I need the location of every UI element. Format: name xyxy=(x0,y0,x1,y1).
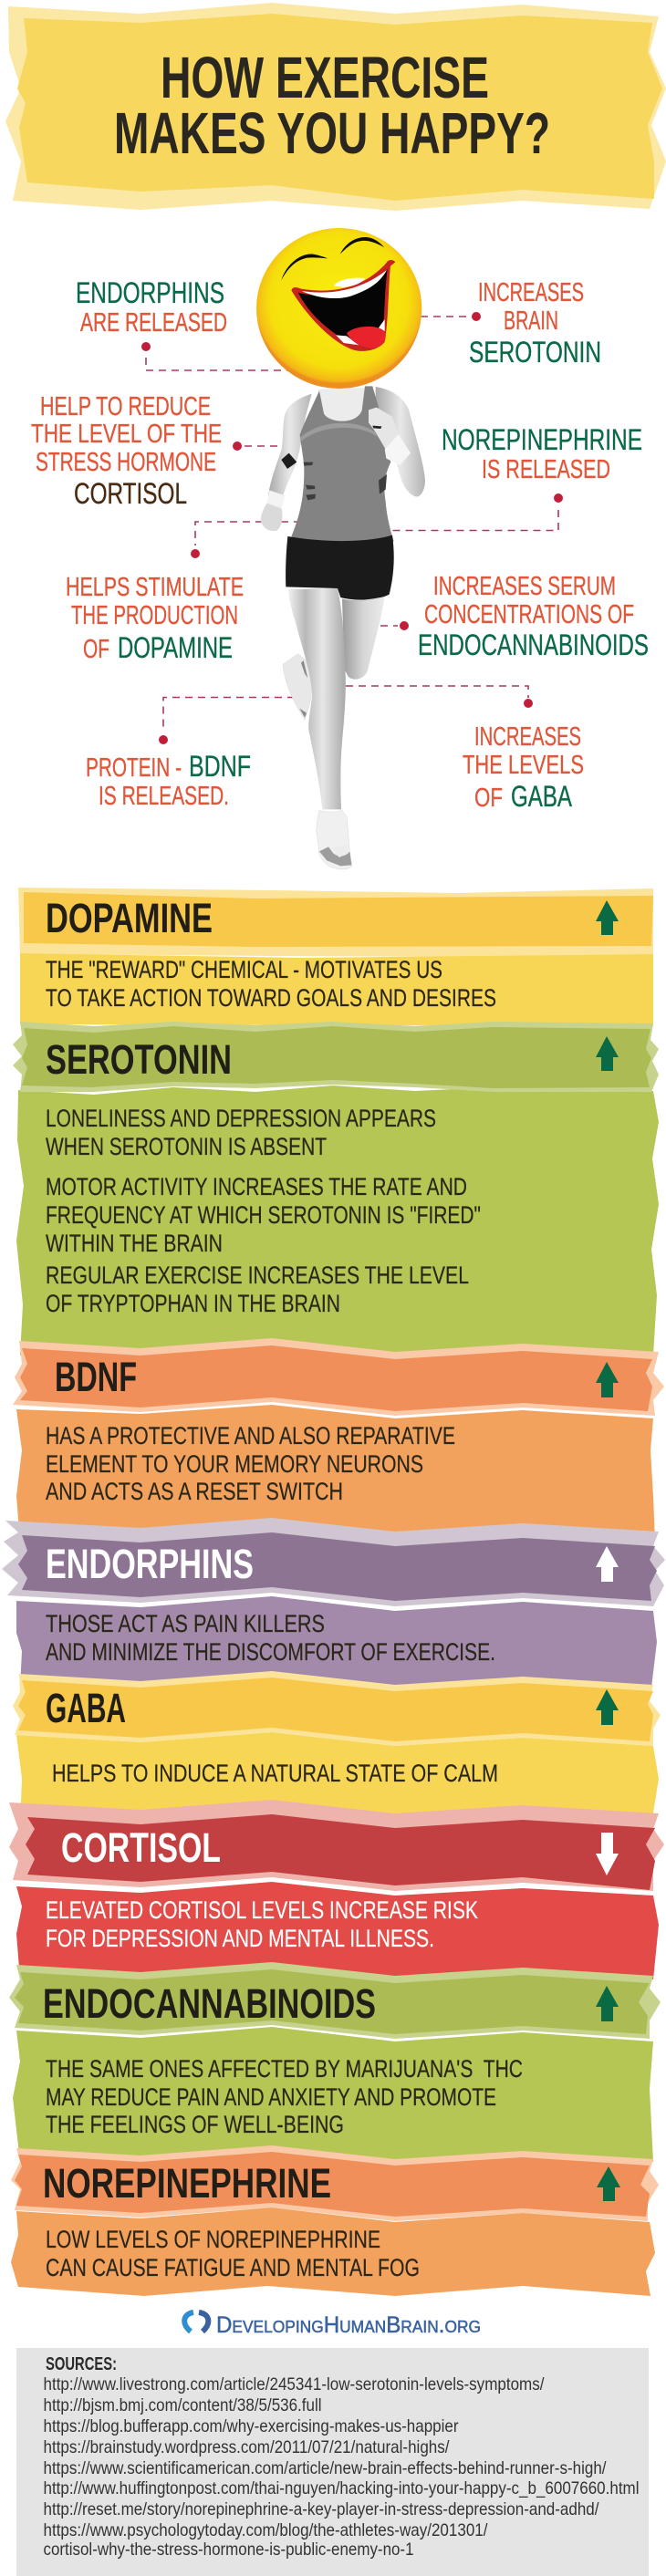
title banner xyxy=(5,3,666,211)
laughing face icon xyxy=(256,228,421,389)
icon: up arrow xyxy=(596,1362,619,1397)
text block xyxy=(46,1896,478,1952)
callout: bdnf: BDNF xyxy=(189,750,251,783)
text block xyxy=(46,1422,455,1505)
callout: serotonin: SEROTONIN xyxy=(469,336,601,369)
panel: norepinephrine xyxy=(11,2145,659,2296)
logo: DevelopingHumanBrain.org xyxy=(216,2312,481,2338)
heading: BDNF xyxy=(55,1354,137,1400)
callout: gaba: INCREASES xyxy=(474,722,581,752)
callout: gaba: THE LEVELS xyxy=(463,751,584,780)
title: HOW EXERCISE xyxy=(161,45,489,110)
text block: OF TRYPTOPHAN IN THE BRAIN xyxy=(46,1290,340,1317)
heading: SEROTONIN xyxy=(46,1036,232,1083)
text block: FREQUENCY AT WHICH SEROTONIN IS "FIRED" xyxy=(46,1201,481,1229)
callout: gaba: OF xyxy=(474,784,503,813)
source links: http://reset.me/story/norepinephrine-a-key-player-in-stress-depression-and-adhd/ xyxy=(44,2499,599,2519)
source links: https://blog.bufferapp.com/why-exercising-makes-us-happier xyxy=(44,2416,459,2436)
text block: LONELINESS AND DEPRESSION APPEARS xyxy=(46,1105,436,1132)
source links xyxy=(44,2374,639,2560)
text block: REGULAR EXERCISE INCREASES THE LEVEL xyxy=(46,1262,469,1289)
callout: norepinephrine xyxy=(388,423,642,531)
text block: CAN CAUSE FATIGUE AND MENTAL FOG xyxy=(46,2254,420,2281)
callout: endorphins xyxy=(76,276,292,370)
text block: WITHIN THE BRAIN xyxy=(46,1230,223,1257)
text block: THOSE ACT AS PAIN KILLERS xyxy=(46,1610,325,1637)
source links: http://www.livestrong.com/article/245341-low-serotonin-levels-symptoms/ xyxy=(44,2374,545,2394)
callout: serotonin xyxy=(421,278,601,369)
upper body xyxy=(261,386,425,546)
heading: DOPAMINE xyxy=(46,895,213,941)
callout: bdnf: IS RELEASED. xyxy=(99,782,229,811)
callout: cortisol xyxy=(31,392,285,510)
text block xyxy=(46,956,496,1012)
icon: up arrow xyxy=(596,1689,619,1725)
text block: HELPS TO INDUCE A NATURAL STATE OF CALM xyxy=(52,1760,498,1787)
text block: WHEN SEROTONIN IS ABSENT xyxy=(46,1133,327,1160)
text block: THE "REWARD" CHEMICAL - MOTIVATES US xyxy=(46,956,442,983)
icon: down arrow xyxy=(596,1833,619,1875)
panel: sources xyxy=(16,2348,649,2576)
callout: endorphins: ENDORPHINS xyxy=(76,276,224,309)
callout: cortisol: THE LEVEL OF THE xyxy=(31,420,222,449)
callout: bdnf: PROTEIN - xyxy=(86,753,182,783)
callout: endocannabinoids xyxy=(380,572,649,661)
icon: up arrow xyxy=(596,1546,619,1582)
panel: dopamine xyxy=(18,888,653,1026)
source links: cortisol-why-the-stress-hormone-is-public-enemy-no-1 xyxy=(44,2540,414,2560)
callout: cortisol: STRESS HORMONE xyxy=(36,448,216,477)
panel: endocannabinoids xyxy=(9,1962,661,2162)
icon: up arrow xyxy=(596,900,619,935)
heading: NOREPINEPHRINE xyxy=(43,2160,331,2207)
text block: THE SAME ONES AFFECTED BY MARIJUANA'S THC xyxy=(46,2055,523,2083)
source links: https://www.psychologytoday.com/blog/the-athletes-way/201301/ xyxy=(44,2520,488,2540)
text block: HAS A PROTECTIVE AND ALSO REPARATIVE xyxy=(46,1422,455,1449)
source links: https://brainstudy.wordpress.com/2011/07/21/natural-highs/ xyxy=(44,2437,450,2457)
text block xyxy=(46,1105,481,1317)
callout: dopamine: OF xyxy=(83,635,109,664)
heading: GABA xyxy=(46,1685,126,1731)
callout: norepinephrine: IS RELEASED xyxy=(482,455,610,484)
callout: serotonin: INCREASES xyxy=(478,278,584,307)
shorts and legs xyxy=(283,535,394,869)
runner figure xyxy=(261,386,425,869)
callout: cortisol: HELP TO REDUCE xyxy=(40,392,211,421)
text block: THE FEELINGS OF WELL-BEING xyxy=(46,2111,344,2138)
callout: serotonin: BRAIN xyxy=(504,306,558,336)
panel: serotonin xyxy=(13,1022,659,1356)
text block: MOTOR ACTIVITY INCREASES THE RATE AND xyxy=(46,1173,467,1200)
callout: bdnf xyxy=(86,697,295,811)
icon: up arrow xyxy=(597,2166,620,2201)
text block: MAY REDUCE PAIN AND ANXIETY AND PROMOTE xyxy=(46,2083,496,2111)
text block: FOR DEPRESSION AND MENTAL ILLNESS. xyxy=(46,1925,434,1952)
text block: TO TAKE ACTION TOWARD GOALS AND DESIRES xyxy=(46,984,496,1012)
callout: endorphins: ARE RELEASED xyxy=(80,308,227,338)
heading: CORTISOL xyxy=(61,1824,221,1871)
title xyxy=(114,45,550,166)
text block: AND ACTS AS A RESET SWITCH xyxy=(46,1478,343,1505)
icon: up arrow xyxy=(596,1036,619,1071)
text block: ELEVATED CORTISOL LEVELS INCREASE RISK xyxy=(46,1896,478,1924)
callout: dopamine xyxy=(66,522,301,664)
text block xyxy=(46,2226,420,2281)
text block xyxy=(46,1610,495,1666)
callout: dopamine: HELPS STIMULATE xyxy=(66,573,244,602)
callout: dopamine: THE PRODUCTION xyxy=(71,601,238,630)
text block: ELEMENT TO YOUR MEMORY NEURONS xyxy=(46,1450,423,1478)
source links: http://bjsm.bmj.com/content/38/5/536.full xyxy=(44,2395,321,2415)
heading: sources: SOURCES: xyxy=(46,2354,117,2374)
heading: ENDORPHINS xyxy=(46,1541,254,1587)
callout: cortisol: CORTISOL xyxy=(74,477,187,510)
text block xyxy=(46,2055,523,2138)
panel: gaba xyxy=(13,1671,661,1824)
callout: gaba: GABA xyxy=(511,780,572,813)
callout: dopamine: DOPAMINE xyxy=(118,631,233,664)
text block: LOW LEVELS OF NOREPINEPHRINE xyxy=(46,2226,380,2253)
text block: AND MINIMIZE THE DISCOMFORT OF EXERCISE. xyxy=(46,1638,495,1666)
heading: ENDOCANNABINOIDS xyxy=(43,1980,376,2027)
panel: bdnf xyxy=(13,1338,664,1542)
callout: gaba xyxy=(346,686,584,813)
panel: endorphins xyxy=(2,1518,665,1688)
panel: cortisol xyxy=(9,1800,664,1979)
icon: up arrow xyxy=(596,1986,619,2021)
